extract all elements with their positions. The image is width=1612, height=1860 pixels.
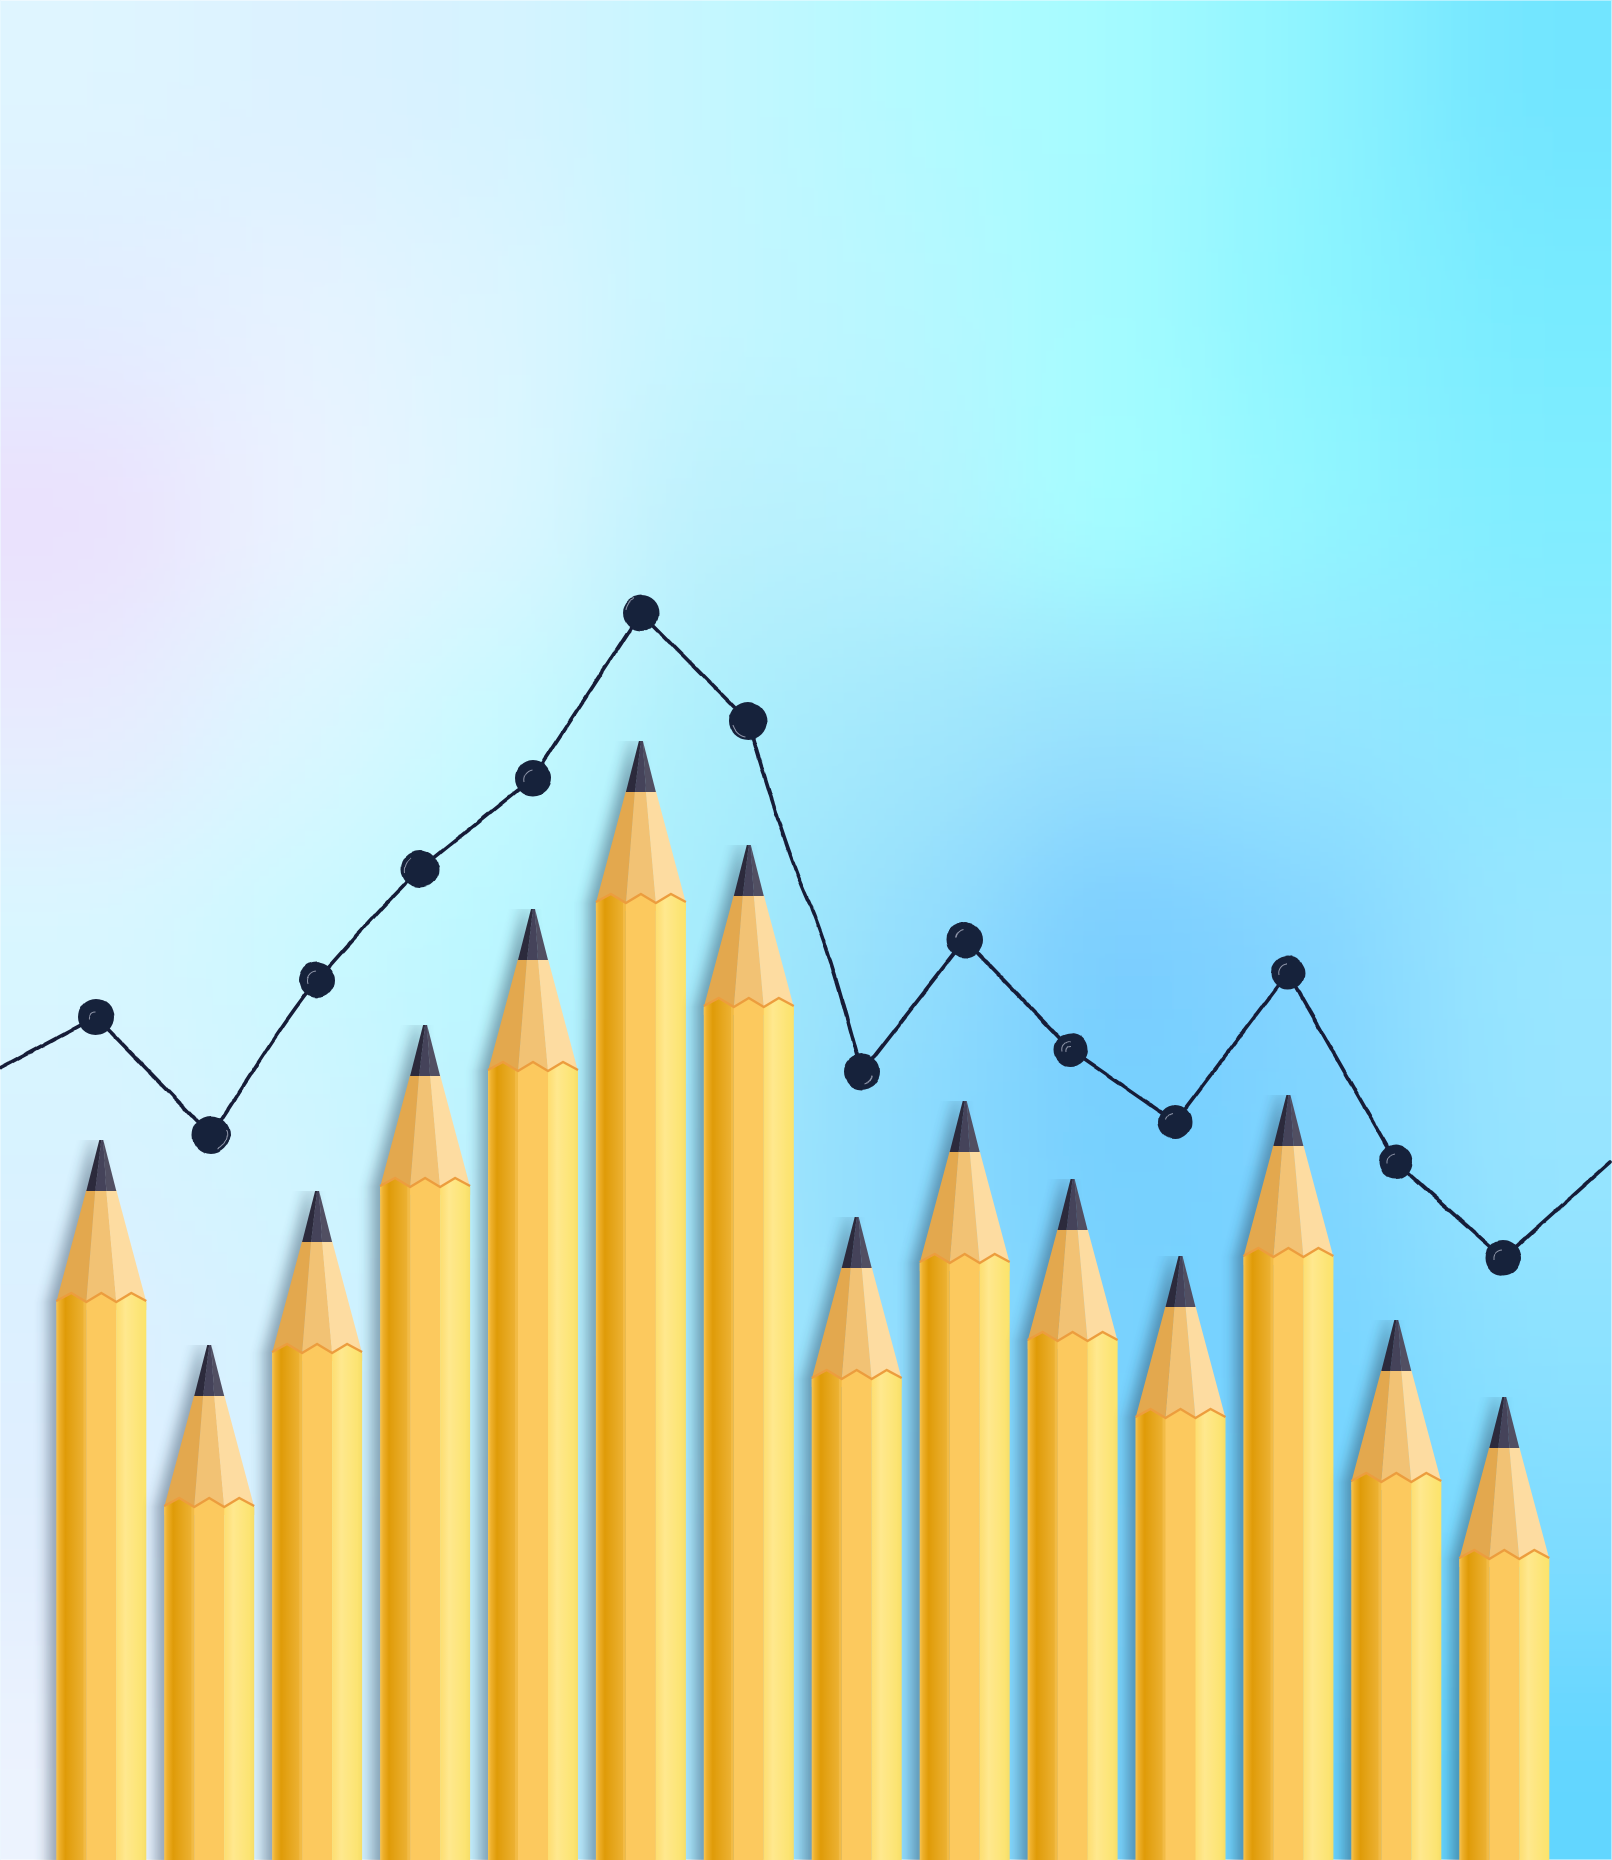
data point 11 <box>1158 1105 1192 1139</box>
pencil bar 9 <box>912 1101 1010 1860</box>
line chart stroke <box>1 613 1610 1258</box>
pencil bar 7 <box>696 845 794 1860</box>
pencil bar 10 <box>1020 1179 1118 1860</box>
pencil bar 2 <box>156 1345 254 1860</box>
pencil bar 13 <box>1343 1320 1441 1860</box>
pencil bar 8 <box>804 1217 902 1860</box>
data point 5 <box>515 760 551 796</box>
pencil bar 12 <box>1235 1095 1333 1860</box>
data point 12 <box>1271 956 1305 990</box>
data point 6 <box>623 595 659 631</box>
data point 7 <box>729 702 767 740</box>
pencil bar 11 <box>1128 1256 1226 1860</box>
pencil bar 4 <box>372 1025 470 1860</box>
pencil bar 6 <box>588 741 686 1860</box>
data point 10 <box>1054 1033 1088 1067</box>
data point 9 <box>947 922 983 958</box>
data point 14 <box>1485 1240 1521 1276</box>
pencil bar 14 <box>1451 1397 1549 1860</box>
data point 1 <box>78 999 114 1035</box>
hand-drawn line chart <box>1 595 1610 1276</box>
pencil bar 1 <box>48 1140 146 1860</box>
data point 13 <box>1379 1145 1413 1179</box>
data point 3 <box>299 962 335 998</box>
data point 4 <box>401 850 439 888</box>
pencil bar 3 <box>264 1191 362 1860</box>
pencil bar 5 <box>480 909 578 1860</box>
pencil bars <box>48 741 1549 1860</box>
data point 2 <box>192 1116 230 1154</box>
data point 8 <box>844 1054 880 1090</box>
